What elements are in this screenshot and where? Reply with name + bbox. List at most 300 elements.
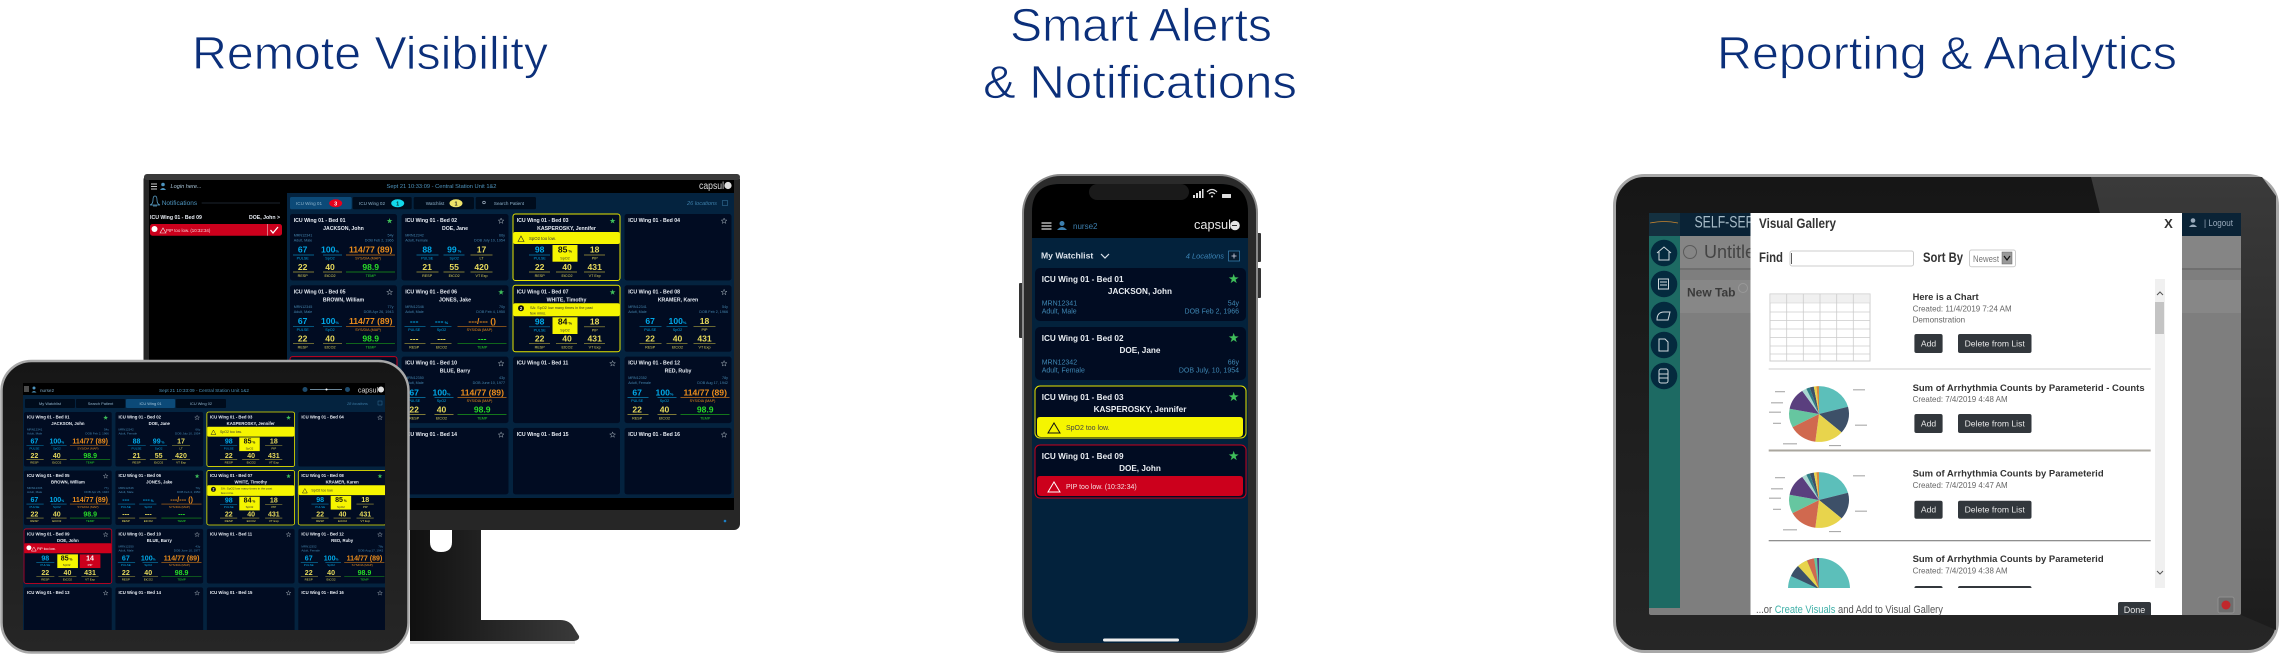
gallery item: Arrhythmia partial: Sum of Arrhythmia Counts by Parameterid bbox=[1913, 554, 2104, 565]
card: bed 07 yellow alert: 84 % bbox=[558, 316, 573, 326]
card: bed 10: ICU Wing 01 - Bed 10 bbox=[118, 531, 162, 536]
card: bed 08 bbox=[624, 285, 732, 352]
card: bed 06: --- % bbox=[435, 316, 449, 326]
card: bed 02 bbox=[402, 214, 508, 280]
card: bed 09 red alert: 98 bbox=[41, 556, 49, 563]
card: bed 02: Adult, Female bbox=[118, 432, 137, 436]
card: bed 03 yellow alert: PULSE bbox=[534, 256, 546, 260]
card: bed 02: 420 bbox=[175, 453, 187, 460]
card: bed 12: Adult, Female bbox=[628, 381, 651, 385]
new tab label bbox=[1687, 284, 1748, 300]
card: bed 06: JONES, Jake bbox=[146, 480, 173, 485]
card: bed 05: Adult, Male bbox=[294, 310, 312, 314]
card: bed 06: 70y bbox=[195, 486, 201, 490]
patient tabs: Watchlist bbox=[426, 201, 445, 206]
card: bed 05: DOB Apr 26, 1943 bbox=[84, 490, 109, 494]
button: delete bbox=[1958, 414, 2032, 433]
card: bed 08: VT Exp bbox=[698, 345, 711, 349]
card: bed 12: 40 bbox=[327, 570, 335, 577]
card: bed 10 bbox=[115, 529, 203, 583]
button: add bbox=[1914, 501, 1943, 519]
card: bed 10: EtCO2 bbox=[436, 417, 447, 421]
phone screen bbox=[1032, 184, 1248, 643]
title: Smart Alerts & Notifications: & Notifications bbox=[983, 56, 1297, 108]
card: bed 03 yellow alert: RESP bbox=[225, 461, 233, 465]
card: bed 11: ICU Wing 01 - Bed 11 bbox=[517, 361, 568, 367]
monitor top bar bbox=[151, 181, 732, 192]
card: bed 08 yellow alert: EtCO2 bbox=[338, 519, 347, 523]
card: bed 05: 100% bbox=[49, 497, 64, 504]
card: bed 07 yellow alert bbox=[513, 285, 620, 352]
card: bed 02: 420 bbox=[474, 262, 489, 272]
app title: SELF-SER bbox=[1694, 213, 1754, 232]
card: bed 08 yellow alert bbox=[298, 470, 386, 525]
card: bed 12: ICU Wing 01 - Bed 12 bbox=[301, 531, 344, 536]
card: bed 08: DOB Feb 2, 1966 bbox=[699, 310, 728, 314]
gallery item: Arrhythmia: Created: 7/4/2019 4:47 AM bbox=[1913, 480, 2008, 490]
card: bed 10: 100% bbox=[433, 387, 451, 397]
card: bed 07 yellow alert: RESP bbox=[225, 519, 233, 523]
card: bed 03 yellow alert: 22 bbox=[225, 453, 233, 460]
card: bed 07 yellow alert: PIP bbox=[271, 505, 276, 509]
card: bed 01: ICU Wing 01 - Bed 01 bbox=[294, 218, 346, 224]
card: bed 07 yellow alert: PULSE bbox=[534, 328, 546, 332]
card: bed 13: ICU Wing 01 - Bed 13 bbox=[27, 590, 70, 595]
card: bed 10: 98.9 bbox=[474, 405, 491, 415]
notifications panel: Notifications bbox=[162, 200, 198, 207]
card: bed 12: 22 bbox=[632, 405, 642, 415]
watchlist heading bbox=[1041, 251, 1240, 261]
card: bed 06: ---/--- () bbox=[170, 497, 193, 504]
card: bed 10: 114/77 (89) bbox=[164, 556, 199, 563]
alert row: PIP too low. (10:32:34) bbox=[166, 228, 211, 233]
card: bed 10: DOB June 10, 1977 bbox=[174, 548, 201, 552]
monitor body bbox=[144, 174, 740, 530]
card: bed 08: 18 bbox=[700, 316, 709, 326]
gallery item: Here is a Chart: Here is a Chart bbox=[1913, 292, 1979, 303]
notifications panel: DOE, John > bbox=[249, 215, 280, 221]
card: bed 05 bbox=[290, 285, 397, 352]
monitor screen bbox=[149, 180, 734, 510]
alert banner: 2 bbox=[520, 306, 523, 311]
button: add bbox=[1914, 334, 1943, 353]
alert banner: SpO2 too low. bbox=[529, 236, 556, 241]
card: bed 07 yellow alert: PIP bbox=[592, 328, 598, 332]
card: bed 07 yellow alert: VT Exp bbox=[269, 519, 279, 523]
alert banner: SA: SpO2 low many times in the past bbox=[221, 487, 272, 491]
card: bed 03 yellow alert: EtCO2 bbox=[247, 461, 256, 465]
card: bed 12: DOB Aug 17, 1942 bbox=[358, 548, 383, 552]
card: bed 08 yellow alert: VT Exp bbox=[360, 519, 371, 523]
card: bed 11: ICU Wing 01 - Bed 11 bbox=[210, 531, 253, 536]
card: bed 02: Adult, Female bbox=[405, 238, 428, 242]
card: bed 08 yellow alert: 22 bbox=[316, 511, 324, 518]
card: bed 03 yellow alert: KASPEROSKY, Jennifer bbox=[227, 421, 275, 426]
card: bed 12: SpO2 bbox=[660, 399, 669, 403]
card: bed 01: 114/77 (89) bbox=[72, 439, 108, 446]
card: bed 16 bbox=[298, 588, 385, 630]
alert banner bbox=[1037, 476, 1243, 496]
title: Smart Alerts & Notifications: Smart Alerts bbox=[1010, 0, 1272, 51]
card: bed 05: PULSE bbox=[297, 328, 309, 332]
card: bed 10: 22 bbox=[122, 570, 130, 577]
card: bed 01: 54y bbox=[388, 234, 394, 238]
phone card: bed 01: Adult, Male bbox=[1042, 309, 1077, 316]
card: bed 10: 98.9 bbox=[175, 570, 189, 577]
card: bed 06: --- bbox=[178, 511, 186, 518]
tablet tabs: 28 locations bbox=[346, 401, 368, 406]
gallery item: Here is a Chart: Created: 11/4/2019 7:24 AM bbox=[1913, 304, 2012, 314]
card: bed 10: 40 bbox=[437, 405, 446, 415]
card: bed 07 yellow alert: 18 bbox=[590, 316, 600, 326]
card: bed 13 bbox=[24, 588, 112, 630]
card: bed 01: 100% bbox=[49, 439, 64, 446]
card: bed 08: 40 bbox=[673, 333, 682, 343]
card: bed 03 yellow alert: PIP bbox=[271, 446, 276, 450]
card: bed 07 yellow alert: EtCO2 bbox=[247, 519, 256, 523]
gallery item: Arrhythmia partial bbox=[1788, 556, 2103, 588]
card: bed 07 yellow alert: WHITE, Timothy bbox=[234, 480, 268, 485]
card: bed 05: 40 bbox=[325, 333, 335, 343]
card: bed 05: DOB Apr 26, 1943 bbox=[364, 310, 394, 314]
alert banner bbox=[207, 485, 294, 496]
card: bed 01: 67 bbox=[30, 439, 38, 446]
patient tabs: 1 bbox=[454, 201, 458, 207]
card: bed 15: ICU Wing 01 - Bed 15 bbox=[517, 432, 569, 438]
card: bed 09 red alert: ICU Wing 01 - Bed 09 bbox=[27, 531, 70, 536]
button: delete: Delete from List bbox=[1965, 505, 2025, 515]
monitor stand bbox=[410, 530, 579, 644]
card: bed 07 yellow alert: SpO2 bbox=[246, 505, 254, 509]
card: bed 10: PULSE bbox=[408, 399, 421, 403]
card: bed 12: RED, Ruby bbox=[331, 538, 354, 543]
card: bed 10: RESP bbox=[409, 417, 420, 421]
alert banner: SA: SpO2 low many times in the past bbox=[530, 306, 594, 310]
card: bed 05: 40 bbox=[53, 511, 61, 518]
card: bed 09 red alert: 431 bbox=[84, 570, 96, 577]
card: bed 10: DOB June 10, 1977 bbox=[473, 381, 505, 385]
phone card: bed 02: MRN12342 bbox=[1042, 360, 1077, 367]
search controls: Newest bbox=[1973, 254, 1999, 264]
new tab label: New Tab bbox=[1687, 286, 1735, 300]
card: bed 01: DOB Feb 2, 1966 bbox=[365, 238, 394, 242]
tablet tabs: Search Patient bbox=[88, 401, 114, 406]
card: bed 03 yellow alert: 22 bbox=[535, 262, 545, 272]
card: bed 07 yellow alert: SpO2 bbox=[560, 328, 570, 332]
sidebar icon: home bbox=[1651, 240, 1677, 266]
tablet screen bbox=[23, 383, 386, 642]
card: bed 06: SpO2 bbox=[144, 505, 152, 509]
card: bed 03 yellow alert: 40 bbox=[562, 262, 572, 272]
card: bed 02: PULSE bbox=[421, 256, 434, 260]
phone card: bed 01: DOB Feb 2, 1966 bbox=[1185, 309, 1239, 316]
page heading: Untitled bbox=[1704, 242, 1765, 262]
card: bed 06: --- bbox=[122, 497, 130, 504]
card: bed 10: 40 bbox=[144, 570, 152, 577]
card: bed 03 yellow alert: KASPEROSKY, Jennifer bbox=[537, 226, 596, 232]
card: bed 10: 43y bbox=[195, 544, 201, 548]
card: bed 09 red alert: DOE, John bbox=[57, 538, 79, 543]
card: bed 01: MRN12341 bbox=[294, 234, 312, 238]
modal: visual gallery bbox=[1750, 213, 2182, 620]
card: bed 07 yellow alert: 22 bbox=[225, 511, 233, 518]
card: bed 03 yellow alert: SpO2 bbox=[246, 446, 254, 450]
card: bed 01: RESP bbox=[298, 274, 308, 278]
scrollbar bbox=[2155, 279, 2165, 588]
card: bed 12: SYS/DIA (MAP) bbox=[352, 563, 373, 567]
card: bed 16: ICU Wing 01 - Bed 16 bbox=[628, 432, 680, 438]
card: bed 01: MRN12341 bbox=[27, 428, 43, 432]
card: bed 07 yellow alert: 40 bbox=[247, 511, 255, 518]
card: bed 05: 114/77 (89) bbox=[349, 316, 393, 326]
card: bed 01: 114/77 (89) bbox=[349, 245, 393, 255]
card: bed 06: --- bbox=[437, 333, 446, 343]
bug report icon bbox=[2218, 597, 2234, 613]
phone card: bed 09 red alert: DOE, John bbox=[1119, 464, 1161, 473]
notifications panel bbox=[150, 196, 282, 236]
card: bed 09 red alert: 22 bbox=[41, 570, 49, 577]
card: bed 15: ICU Wing 01 - Bed 15 bbox=[210, 590, 253, 595]
card: bed 05 bbox=[24, 470, 112, 525]
gallery item: Arrhythmia Counts: Created: 7/4/2019 4:48 AM bbox=[1913, 394, 2008, 404]
card: bed 12: 67 bbox=[632, 387, 642, 397]
card: bed 06: --- bbox=[145, 511, 152, 518]
card: bed 10: SYS/DIA (MAP) bbox=[169, 563, 190, 567]
card: bed 12 bbox=[298, 529, 386, 583]
card: bed 01: DOB Feb 2, 1966 bbox=[85, 432, 109, 436]
card: bed 06 bbox=[115, 470, 203, 525]
card: bed 10: Adult, Male bbox=[405, 381, 424, 385]
tablet bezel bbox=[1614, 176, 2278, 652]
card: bed 10: Adult, Male bbox=[118, 548, 134, 552]
card: bed 06 bbox=[402, 285, 508, 352]
card: bed 05: 100% bbox=[321, 316, 339, 326]
card: bed 07 yellow alert: EtCO2 bbox=[561, 345, 573, 349]
card: bed 10: SYS/DIA (MAP) bbox=[467, 399, 492, 403]
sidebar icon: dashboard edit bbox=[1651, 271, 1677, 297]
card: bed 12: RESP bbox=[305, 578, 313, 582]
card: bed 01: RESP bbox=[30, 461, 39, 465]
sidebar icon: report bbox=[1651, 332, 1677, 358]
card: bed 03 yellow alert: EtCO2 bbox=[561, 274, 573, 278]
card: bed 08: ICU Wing 01 - Bed 08 bbox=[628, 289, 680, 295]
card: bed 07 yellow alert: RESP bbox=[535, 345, 545, 349]
card: bed 01: TEMP bbox=[366, 274, 376, 278]
tablet tabs: ICU Wing 01 bbox=[139, 401, 162, 406]
card: bed 05: 77y bbox=[388, 305, 394, 309]
card: bed 03 yellow alert: 85 % bbox=[558, 245, 573, 255]
gallery list bbox=[1768, 294, 2151, 588]
card: bed 02: DOE, Jane bbox=[149, 421, 171, 426]
card: bed 12: 98.9 bbox=[697, 405, 714, 415]
tablet top bar bbox=[24, 386, 384, 394]
card: bed 12: EtCO2 bbox=[327, 578, 336, 582]
phone card: bed 02: 66y bbox=[1228, 360, 1239, 367]
card: bed 04 bbox=[298, 412, 386, 467]
card: bed 10: PULSE bbox=[121, 563, 131, 567]
monitor patient grid bbox=[290, 214, 732, 494]
card: bed 12: 114/77 (89) bbox=[347, 556, 382, 563]
card: bed 07 yellow alert: 84 % bbox=[244, 497, 255, 504]
card: bed 05: ICU Wing 01 - Bed 05 bbox=[294, 289, 346, 295]
alert banner: PIP too low. bbox=[37, 547, 56, 551]
phone body bbox=[1023, 175, 1257, 652]
card: bed 06: RESP bbox=[409, 345, 420, 349]
alert banner bbox=[514, 303, 620, 316]
card: bed 10: SpO2 bbox=[144, 563, 152, 567]
card: bed 06: DOB Feb 4, 1950 bbox=[476, 310, 505, 314]
card: bed 01: 54y bbox=[104, 428, 109, 432]
card: bed 12: DOB Aug 17, 1942 bbox=[697, 381, 728, 385]
card: bed 04: ICU Wing 01 - Bed 04 bbox=[301, 415, 344, 420]
button: add bbox=[1914, 414, 1943, 433]
card: bed 07 yellow alert: 431 bbox=[588, 333, 602, 343]
card: bed 05: SpO2 bbox=[325, 328, 335, 332]
card: bed 06: ICU Wing 01 - Bed 06 bbox=[118, 473, 162, 478]
thumbnail: pie chart bbox=[1769, 472, 1867, 532]
tablet tabs bbox=[25, 399, 382, 408]
phone side buttons bbox=[1019, 233, 1261, 338]
card: bed 01: JACKSON, John bbox=[51, 421, 85, 426]
card: bed 10 bbox=[402, 357, 508, 423]
card: bed 10: 67 bbox=[409, 387, 419, 397]
card: bed 08 yellow alert: 40 bbox=[339, 511, 347, 518]
card: bed 07 yellow alert: 40 bbox=[562, 333, 572, 343]
card: bed 09 red alert: 85 % bbox=[61, 556, 73, 563]
device: left tablet bbox=[2, 361, 408, 652]
card: bed 12: 114/77 (89) bbox=[683, 387, 727, 397]
card: bed 12: PULSE bbox=[304, 563, 314, 567]
card: bed 08: 431 bbox=[697, 333, 712, 343]
button: add: Add bbox=[1921, 418, 1936, 428]
card: bed 05: 67 bbox=[298, 316, 308, 326]
card: bed 07 yellow alert: 98 bbox=[535, 316, 545, 326]
home indicator bbox=[1103, 638, 1179, 642]
phone card: bed 02 bbox=[1035, 327, 1246, 380]
card: bed 05: SYS/DIA (MAP) bbox=[77, 505, 99, 509]
card: bed 09 red alert: RESP bbox=[41, 578, 49, 582]
card: bed 06: EtCO2 bbox=[144, 519, 153, 523]
card: bed 01: 98.9 bbox=[83, 453, 97, 460]
phone card: bed 02: DOE, Jane bbox=[1120, 346, 1161, 355]
card: bed 08: 67 bbox=[645, 316, 655, 326]
card: bed 02: VT Exp bbox=[176, 461, 186, 465]
card: bed 01: JACKSON, John bbox=[323, 226, 364, 232]
card: bed 02: 66y bbox=[499, 234, 505, 238]
tablet patient grid bbox=[24, 412, 386, 642]
card: bed 10: 100% bbox=[141, 556, 156, 563]
card: bed 03 yellow alert: SpO2 bbox=[560, 256, 570, 260]
card: bed 05: TEMP bbox=[86, 519, 94, 523]
phone card: bed 09 red alert: ICU Wing 01 - Bed 09 bbox=[1042, 452, 1124, 461]
thumbnail: pie chart cropped bbox=[1788, 558, 1850, 588]
alert banner: PIP too low. (10:32:34) bbox=[1066, 484, 1137, 491]
phone card: bed 03 yellow alert: KASPEROSKY, Jennifer bbox=[1094, 405, 1187, 414]
card: bed 05: MRN12345 bbox=[294, 305, 312, 309]
card: bed 10: 43y bbox=[499, 376, 505, 380]
card: bed 05: ICU Wing 01 - Bed 05 bbox=[27, 473, 70, 478]
monitor power light bbox=[724, 520, 726, 522]
card: bed 11 bbox=[207, 529, 295, 583]
card: bed 12: SYS/DIA (MAP) bbox=[690, 399, 715, 403]
card: bed 06: --- bbox=[122, 511, 130, 518]
card: bed 02: VT Exp bbox=[475, 274, 488, 278]
thumbnail: table bbox=[1770, 294, 1870, 361]
card: bed 05: MRN12345 bbox=[27, 486, 43, 490]
card: bed 08 yellow alert: RESP bbox=[316, 519, 324, 523]
card: bed 01: SYS/DIA (MAP) bbox=[77, 446, 99, 450]
card: bed 03 yellow alert: 18 bbox=[270, 439, 278, 446]
card: bed 03 yellow alert: 98 bbox=[535, 245, 545, 255]
tablet tabs: ICU Wing 02 bbox=[190, 401, 212, 406]
card: bed 02: PULSE bbox=[132, 446, 141, 450]
search controls: Sort By bbox=[1923, 249, 1963, 265]
card: bed 12: 78y bbox=[378, 544, 384, 548]
phone card: bed 03 yellow alert bbox=[1035, 386, 1246, 438]
card: bed 02: 17 bbox=[177, 439, 185, 446]
card: bed 01: SYS/DIA (MAP) bbox=[355, 256, 381, 260]
card: bed 07 yellow alert: VT Exp bbox=[589, 345, 601, 349]
gallery item: Arrhythmia bbox=[1769, 469, 2151, 541]
card: bed 08: Adult, Male bbox=[628, 310, 647, 314]
card: bed 05: EtCO2 bbox=[324, 345, 336, 349]
card: bed 08: SpO2 bbox=[673, 328, 682, 332]
card: bed 05: SYS/DIA (MAP) bbox=[355, 328, 381, 332]
phone card: bed 01: MRN12341 bbox=[1042, 301, 1077, 308]
card: bed 06: ---/--- () bbox=[468, 316, 496, 326]
card: bed 03 yellow alert: 431 bbox=[268, 453, 280, 460]
card: bed 01: 67 bbox=[298, 245, 308, 255]
tablet top bar: nurse2 bbox=[40, 388, 54, 393]
card: bed 03 yellow alert: ICU Wing 01 - Bed 03 bbox=[210, 415, 253, 420]
button: done bbox=[2118, 602, 2151, 615]
card: bed 10: BLUE, Barry bbox=[147, 538, 172, 543]
card: bed 01: Adult, Male bbox=[294, 238, 312, 242]
card: bed 02 bbox=[115, 412, 203, 467]
card: bed 03 yellow alert: VT Exp bbox=[589, 274, 601, 278]
card: bed 01: 98.9 bbox=[362, 262, 379, 272]
card: bed 01: 22 bbox=[30, 453, 38, 460]
card: bed 12: TEMP bbox=[700, 417, 711, 421]
card: bed 06: SpO2 bbox=[437, 328, 446, 332]
card: bed 03 yellow alert: 18 bbox=[590, 245, 600, 255]
phone card: bed 02: DOB July, 10, 1954 bbox=[1179, 368, 1239, 375]
card: bed 12: 78y bbox=[722, 376, 728, 380]
card: bed 06: PULSE bbox=[408, 328, 421, 332]
card: bed 14: ICU Wing 01 - Bed 14 bbox=[405, 432, 457, 438]
monitor top bar: Login here... bbox=[170, 184, 202, 190]
card: bed 05: 77y bbox=[104, 486, 109, 490]
card: bed 06: --- bbox=[478, 333, 487, 343]
card: bed 01: PULSE bbox=[29, 446, 39, 450]
card: bed 10: TEMP bbox=[477, 417, 488, 421]
card: bed 15 bbox=[513, 428, 620, 494]
phone card: bed 01: 54y bbox=[1228, 301, 1239, 308]
card: bed 06: ICU Wing 01 - Bed 06 bbox=[405, 289, 457, 295]
card: bed 03 yellow alert: RESP bbox=[535, 274, 545, 278]
phone header: capsul bbox=[1194, 217, 1231, 232]
card: bed 08 yellow alert: SpO2 bbox=[337, 505, 345, 509]
card: bed 08 yellow alert: 98 bbox=[316, 497, 324, 504]
card: bed 07 yellow alert: 431 bbox=[268, 511, 280, 518]
card: bed 03 yellow alert: PIP bbox=[592, 256, 598, 260]
card: bed 08: 100% bbox=[669, 316, 687, 326]
card: bed 10: TEMP bbox=[177, 578, 186, 582]
card: bed 12: EtCO2 bbox=[659, 417, 670, 421]
button: add: Add bbox=[1921, 338, 1936, 348]
card: bed 01: 100% bbox=[321, 245, 339, 255]
card: bed 08 yellow alert: 85 % bbox=[335, 497, 347, 504]
